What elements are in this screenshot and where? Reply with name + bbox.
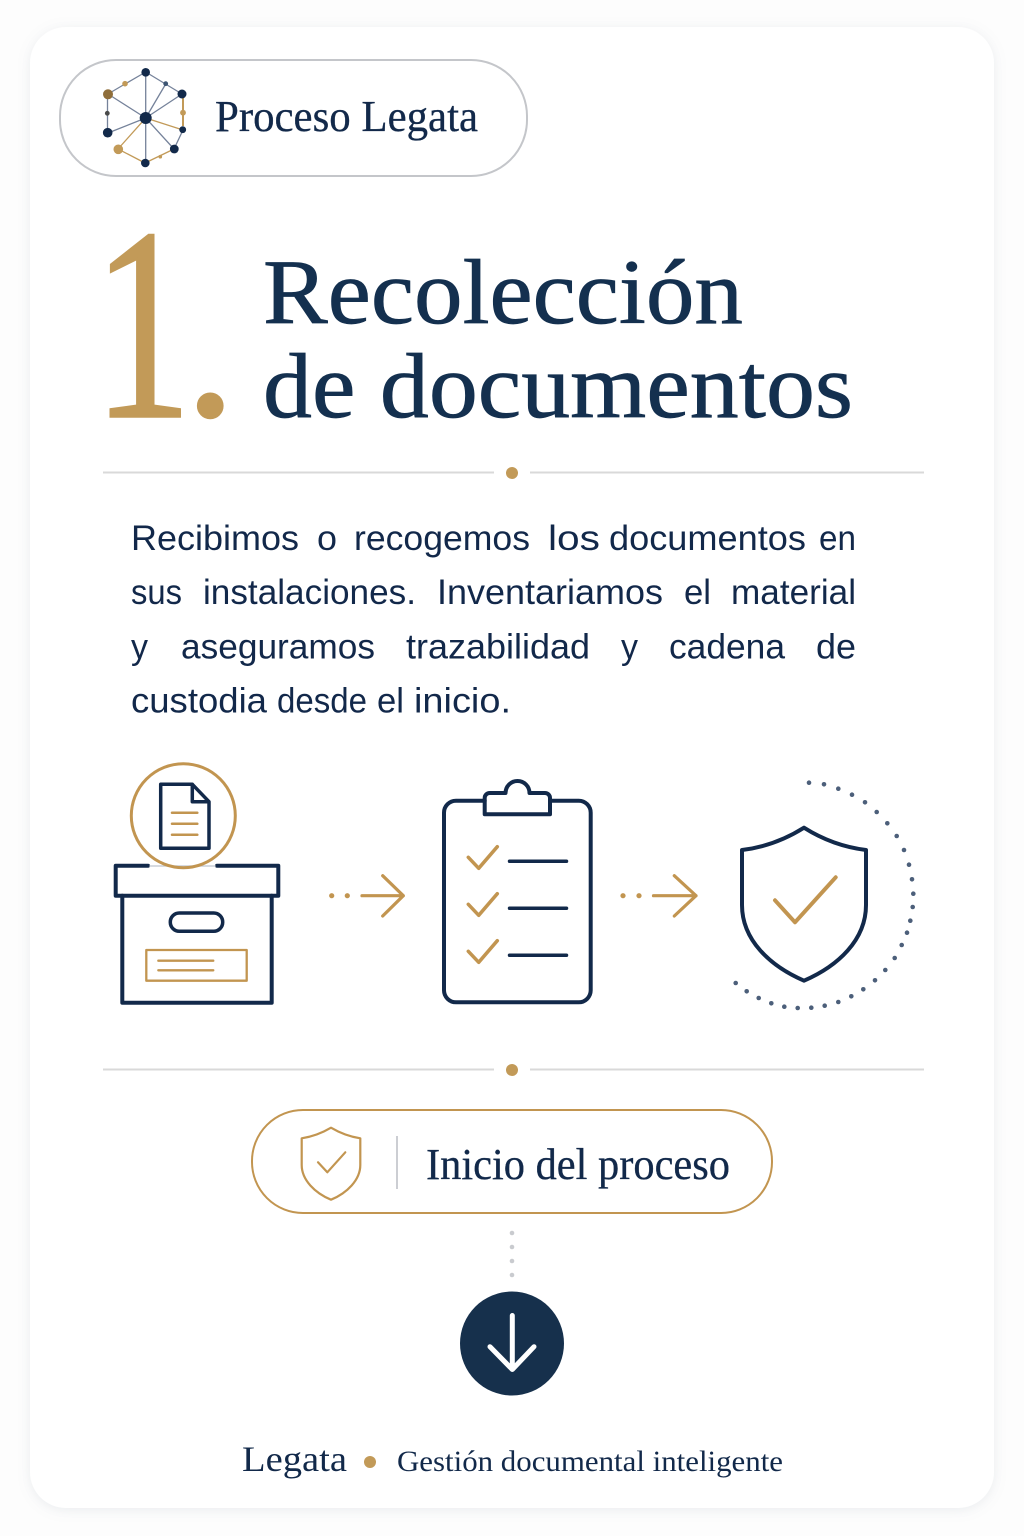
pill label: Inicio del proceso xyxy=(426,1140,730,1189)
description text: custodia xyxy=(131,682,268,720)
description text: aseguramos xyxy=(181,628,375,666)
description text: sus xyxy=(131,573,182,612)
icon: shield with check xyxy=(742,828,866,981)
box body xyxy=(122,896,272,1003)
item lines xyxy=(510,861,566,955)
description text: material xyxy=(731,573,856,612)
document lines xyxy=(172,813,197,835)
description text: trazabilidad xyxy=(406,628,590,666)
description text: inicio. xyxy=(414,682,511,720)
step number: . xyxy=(182,215,238,465)
clipboard clip xyxy=(485,781,550,814)
title: de documentos xyxy=(263,335,853,437)
description text: y xyxy=(131,628,148,666)
description text: recogemos xyxy=(354,519,530,558)
icon: clipboard checklist xyxy=(444,781,591,1002)
footer xyxy=(242,1439,783,1479)
dotted arc xyxy=(733,780,916,1010)
arrow 1 xyxy=(329,876,403,916)
box label xyxy=(146,950,247,981)
dotted connector xyxy=(510,1231,514,1277)
gold circle xyxy=(131,764,235,868)
description text xyxy=(131,519,856,720)
description text: y xyxy=(621,628,638,666)
description text: los xyxy=(548,519,600,558)
title xyxy=(263,241,853,437)
document xyxy=(161,784,209,848)
icon: archive box with document xyxy=(116,764,278,1003)
description text: o xyxy=(317,519,337,558)
description text: documentos xyxy=(609,519,806,558)
badge label: Proceso Legata xyxy=(215,92,478,141)
header badge xyxy=(60,60,527,176)
description text: cadena xyxy=(669,628,786,666)
step number xyxy=(93,171,238,476)
description text: en xyxy=(819,519,856,558)
status pill xyxy=(252,1110,772,1213)
divider top xyxy=(103,467,924,479)
step number: 1 xyxy=(93,171,192,476)
box handle xyxy=(170,913,223,931)
icon: small shield xyxy=(302,1128,360,1200)
description text: Recibimos xyxy=(131,519,299,558)
arrow 2 xyxy=(620,876,696,916)
icon: network logo xyxy=(103,68,186,167)
description text: desde xyxy=(277,682,367,720)
title: Recolección xyxy=(263,241,743,343)
icon: down arrow button xyxy=(460,1292,564,1396)
description text: el xyxy=(684,573,711,612)
box lid xyxy=(116,866,278,896)
check items xyxy=(468,847,497,962)
description text: Inventariamos xyxy=(437,573,663,612)
footer: Gestión documental inteligente xyxy=(397,1445,783,1478)
divider bottom xyxy=(103,1064,924,1076)
description text: instalaciones. xyxy=(203,573,416,612)
description text: de xyxy=(816,628,856,666)
description text: el xyxy=(377,682,404,720)
footer: Legata xyxy=(242,1439,347,1479)
